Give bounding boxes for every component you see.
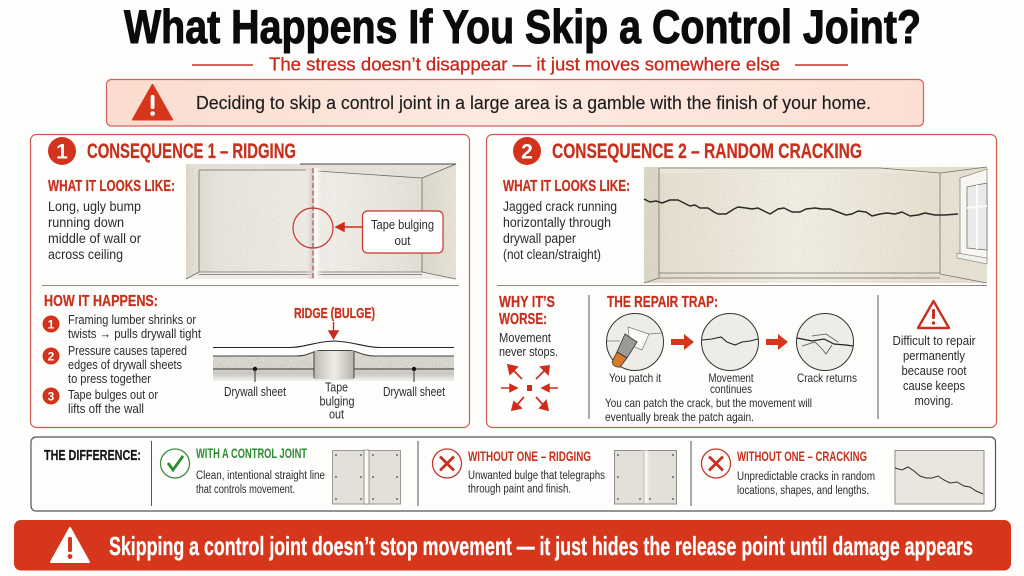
list: step 2: Pressure causes tapered [68,343,187,358]
panel: the difference [31,437,996,511]
bottom callout bar [14,520,1011,570]
icon: warning triangle [133,85,172,120]
item: with a control joint: that controls movement. [196,484,295,496]
subtitle: The stress doesn’t disappear — it just moves somewhere else [269,54,780,74]
item: with a control joint: Clean, intentional straight line [196,470,325,482]
item: without one ridging: through paint and finish. [468,484,571,496]
text block: why it's worse: never stops. [499,344,558,359]
text block: what it looks like: Jagged crack running [503,199,617,214]
icon: warning outline [918,301,949,328]
text block: what it looks like: running down [48,215,124,230]
list: step 3 [42,387,159,416]
text block: why it's worse: Movement [499,330,551,345]
step: movement continues: continues [710,382,752,396]
diagram: ridge cross-section: Tape [325,380,348,394]
warning banner [106,80,924,126]
heading: consequence 1: CONSEQUENCE 1 – RIDGING [87,140,296,163]
panel: consequence 2 random cracking [486,134,996,428]
arrow: step 1 to 2 [671,334,694,350]
text block: why it's worse: WORSE: [499,311,547,328]
text block: what it looks like: middle of wall or [48,231,141,246]
icon: warning white [51,528,89,562]
panel: consequence 1 ridging [30,134,470,428]
callout: tape bulging out: Tape bulging [371,217,434,232]
arrow: to circled tape [336,223,362,231]
text block: what it looks like: Long, ugly bump [48,199,141,214]
heading: the repair trap: THE REPAIR TRAP: [607,294,718,311]
arrow: ridge [329,322,338,338]
step: movement continues: Movement [708,371,754,385]
illustration: wall with ridge [186,164,456,279]
heading: the difference: THE DIFFERENCE: [44,447,141,464]
text block: repair note [605,396,812,424]
text block: repair note: eventually break the patch again. [605,410,754,424]
image: drywall with ridge [614,450,676,504]
text block: difficult to repair [892,333,976,408]
badge: number 1 [48,137,76,165]
badge: number 1: 1 [56,140,68,164]
text block: what it looks like: across ceiling [48,247,123,262]
item: without one cracking: locations, shapes, and lengths. [737,485,869,497]
label: ridge bulge: RIDGE (BULGE) [294,306,375,322]
image: drywall with crack [895,450,984,504]
heading: how it happens: HOW IT HAPPENS: [44,293,158,310]
item: with a control joint [160,445,400,504]
heading: consequence 2: CONSEQUENCE 2 – RANDOM CRACKING [552,140,862,163]
icon: radiating movement arrows [501,365,558,410]
step: crack returns: Crack returns [797,371,857,385]
text block: why it's worse: WHY IT’S [499,294,555,311]
text block: repair note: You can patch the crack, but the movement will [605,396,812,410]
text block: what it looks like [503,178,630,262]
text block: what it looks like: horizontally through [503,215,611,230]
step: crack returns [796,314,857,385]
text block: what it looks like [48,178,175,262]
callout: tape bulging out [362,211,443,253]
list: step 1 [42,312,201,341]
text block: what it looks like: WHAT IT LOOKS LIKE: [503,178,630,195]
text block: what it looks like: (not clean/straight) [503,247,601,262]
item: without one ridging: Unwanted bulge that telegraphs [468,470,605,482]
list: step 1: Framing lumber shrinks or [68,312,197,327]
diagram: ridge cross-section: Drywall sheet [224,384,286,399]
crack [644,199,958,216]
text block: difficult to repair: moving. [914,393,954,408]
badge: number 2: 2 [521,140,533,164]
callout: tape bulging out: out [394,233,411,248]
text block: what it looks like: drywall paper [503,231,576,246]
list: step 3: Tape bulges out or [68,387,159,402]
illustration: window [957,169,987,264]
diagram: ridge cross-section: bulging [320,394,354,408]
text block: difficult to repair: cause keeps [903,378,965,393]
diagram: ridge cross-section: out [329,406,344,422]
list: step 2: 2 [48,350,55,364]
text block: difficult to repair: permanently [903,348,965,363]
arrow: step 2 to 3 [766,334,788,350]
warning banner: Deciding to skip a control joint in a large area is a gamble with the finish of your home. [196,92,871,113]
item: without one cracking: Unpredictable cracks in random [737,471,875,483]
step: movement continues [702,314,758,396]
diagram: ridge cross-section [213,306,454,422]
list: step 2 [42,343,187,386]
item: without one ridging [432,448,676,504]
image: drywall with joint [332,450,400,504]
diagram: ridge cross-section: Drywall sheet [383,384,445,399]
badge: number 2 [513,137,541,165]
item: without one cracking [702,448,984,504]
step: you patch it: You patch it [609,371,662,385]
step: you patch it [606,314,664,385]
text block: difficult to repair: because root [902,363,967,378]
item: with a control joint: WITH A CONTROL JOINT [196,445,307,461]
list: step 2: to press together [68,371,152,386]
list: step 3: 3 [48,390,55,404]
list: step 1: 1 [48,318,55,332]
list: step 2: edges of drywall sheets [68,357,182,372]
text block: why it's worse [499,294,558,359]
illustration: wall with crack [644,167,987,283]
item: without one cracking: WITHOUT ONE – CRACKING [737,448,867,464]
list: step 3: lifts off the wall [68,401,144,416]
text block: difficult to repair: Difficult to repair [892,333,976,348]
list: step 1: twists → pulls drywall tight [68,326,201,341]
item: without one ridging: WITHOUT ONE – RIDGING [468,448,591,464]
text block: what it looks like: WHAT IT LOOKS LIKE: [48,178,175,195]
